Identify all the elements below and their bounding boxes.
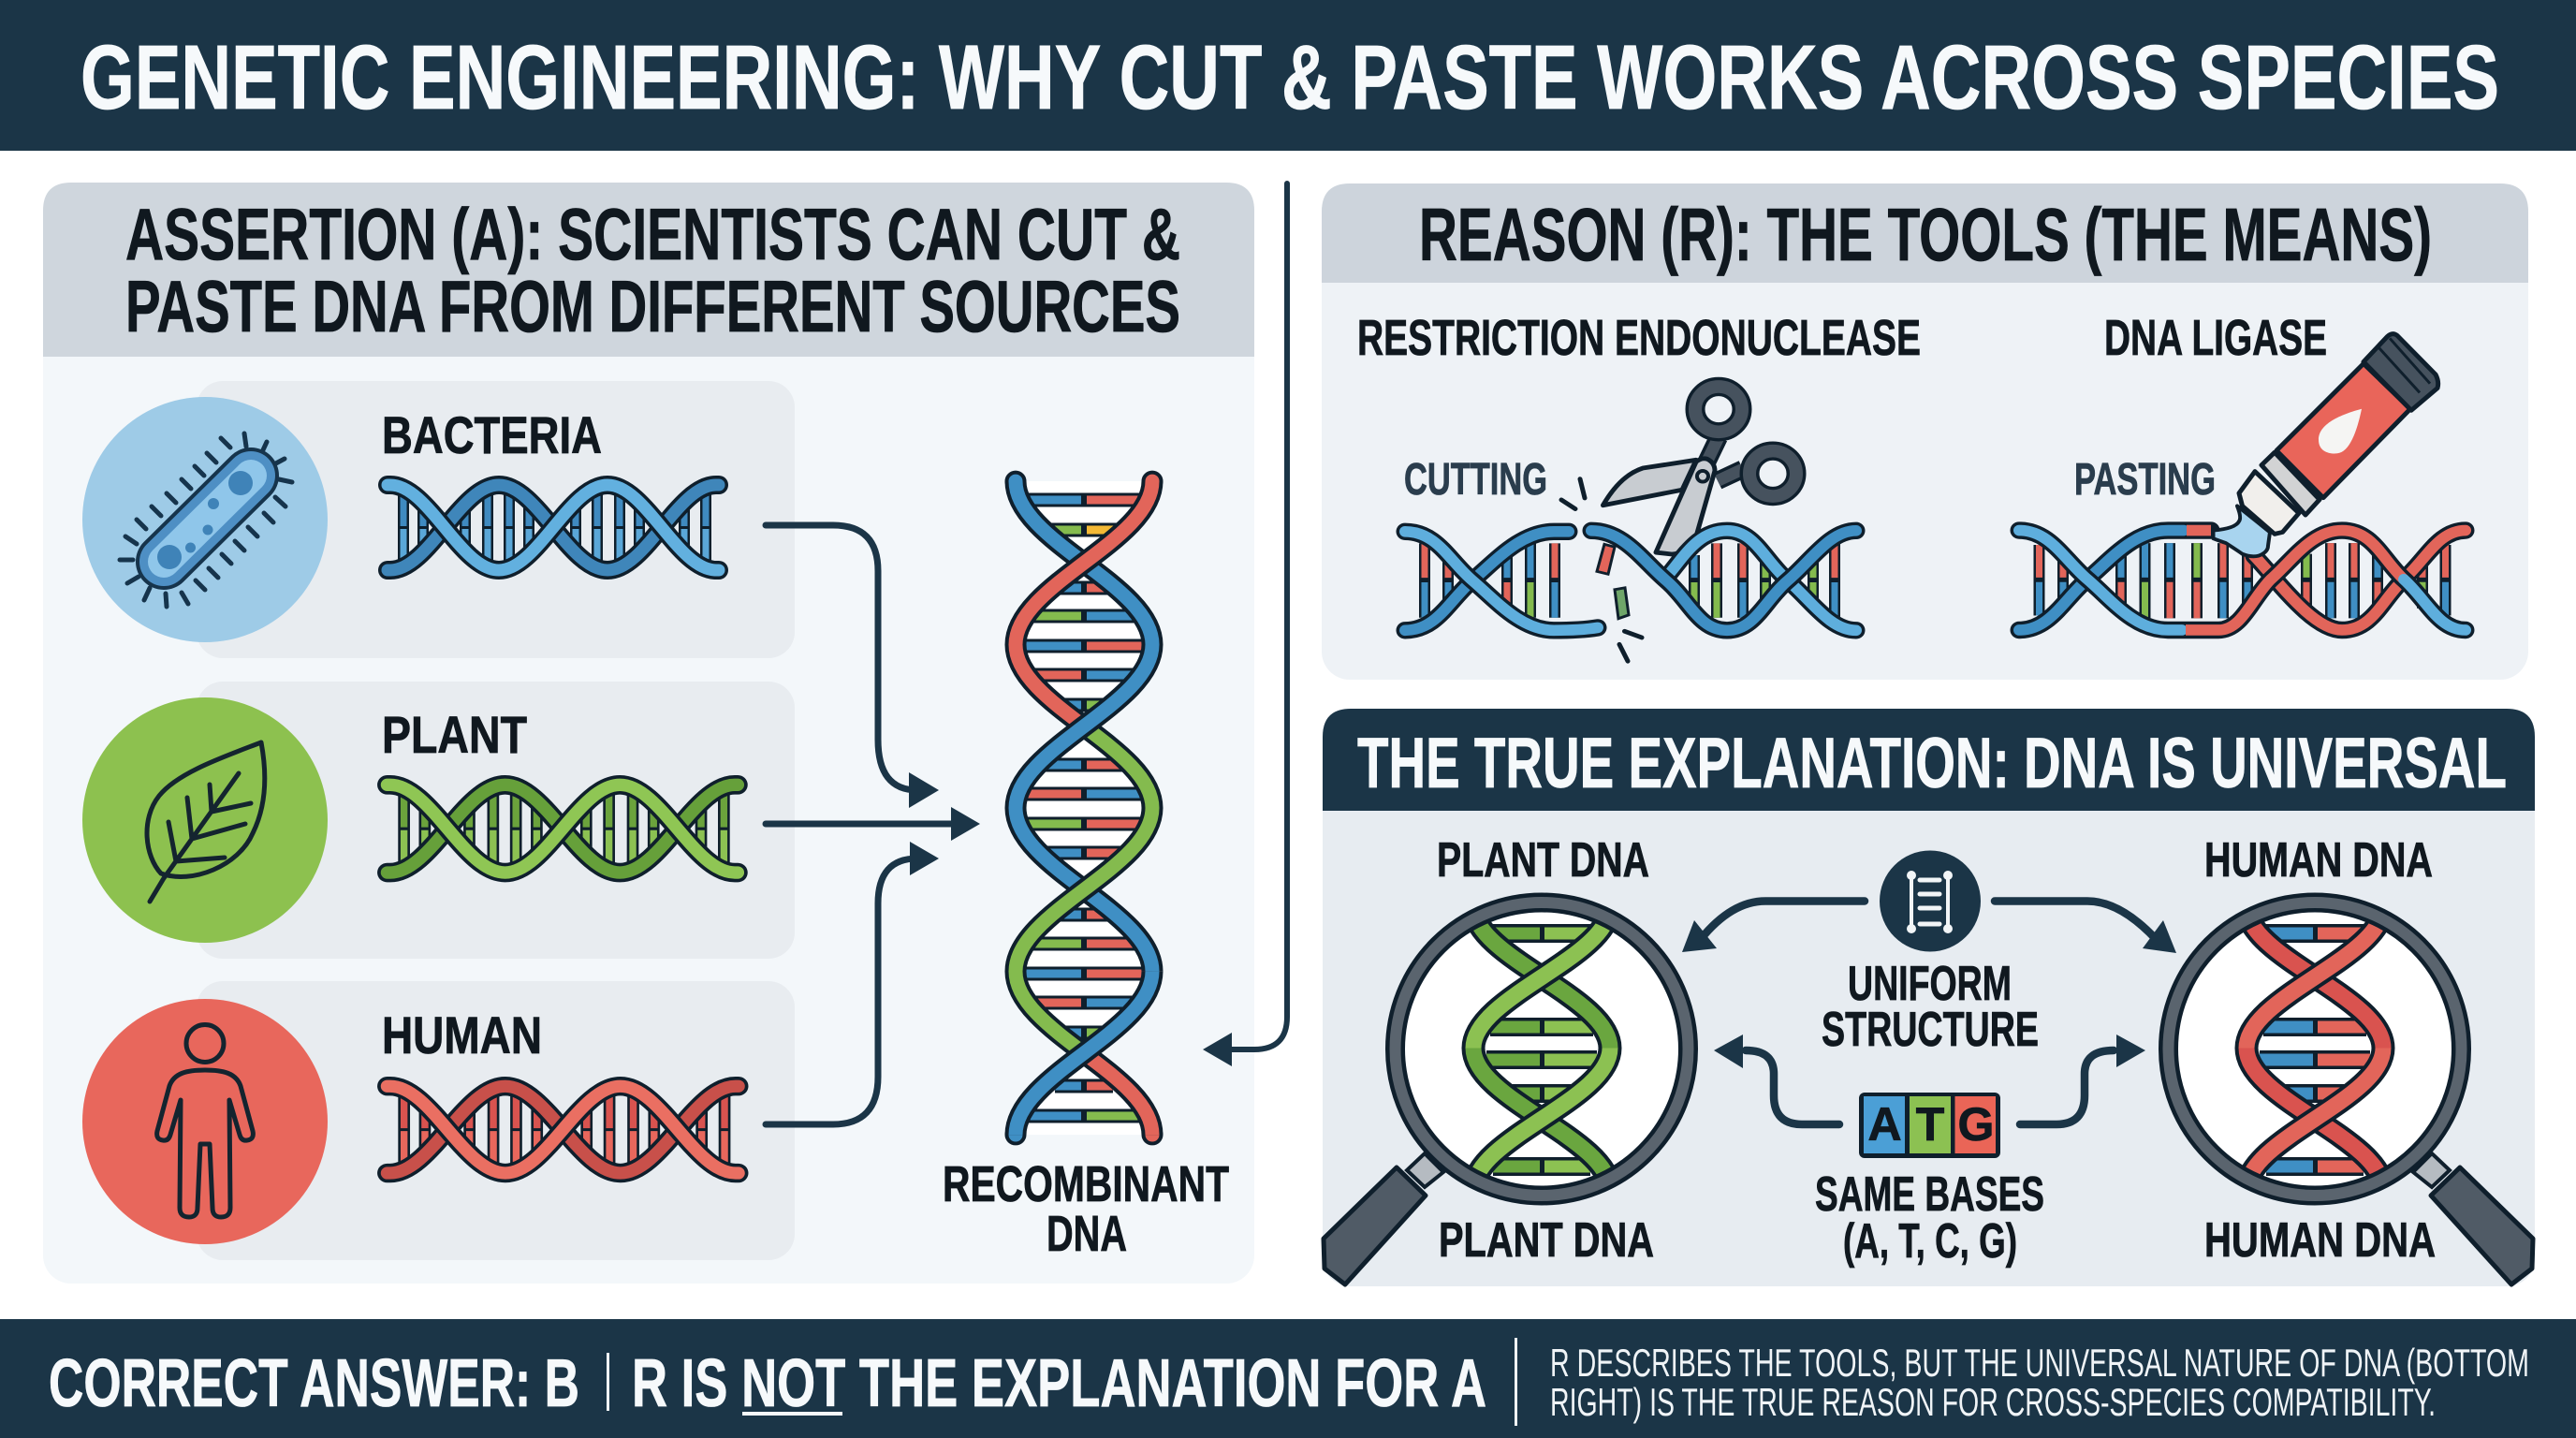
label: human DNA bottom: HUMAN DNA — [2204, 1213, 2436, 1268]
plant DNA helix — [388, 785, 738, 873]
magnifier: human DNA — [2168, 902, 2533, 1284]
icon: uniform structure ladder — [1880, 850, 1981, 951]
label: recombinant DNA: RECOMBINANT — [943, 1156, 1229, 1212]
label: pasting: PASTING — [2074, 455, 2216, 505]
label: DNA ligase: DNA LIGASE — [2104, 310, 2327, 366]
label: recombinant DNA: DNA — [1046, 1206, 1127, 1262]
row: human — [82, 981, 795, 1260]
label: same bases — [1815, 1167, 2044, 1269]
arrow: bases to plant — [1714, 1034, 1839, 1124]
label: same bases: SAME BASES — [1815, 1167, 2044, 1222]
label: plant DNA bottom: PLANT DNA — [1439, 1213, 1654, 1268]
human DNA helix — [388, 1086, 739, 1173]
label: same bases: (A, T, C, G) — [1843, 1214, 2017, 1269]
icon: ATG bases: T — [1916, 1098, 1944, 1151]
bacteria DNA helix — [388, 485, 719, 570]
DNA being cut — [1405, 479, 1856, 661]
label: uniform structure — [1822, 957, 2039, 1057]
icon: scissors — [1603, 387, 1796, 554]
label: plant DNA top: PLANT DNA — [1437, 833, 1649, 888]
label: plant: PLANT — [382, 705, 527, 764]
answer note — [1550, 1341, 2529, 1424]
label: bacteria: BACTERIA — [382, 405, 602, 464]
arrow: bases to human — [2020, 1034, 2145, 1124]
answer reason: R IS NOT THE EXPLANATION FOR A — [632, 1346, 1486, 1421]
panel: assertion — [43, 183, 1254, 1284]
arrow: plant to recombinant — [766, 807, 980, 841]
icon: ATG bases — [1859, 1093, 2000, 1158]
row: plant — [82, 682, 795, 959]
arrow: bacteria to recombinant — [766, 525, 939, 808]
footer banner — [0, 1319, 2576, 1438]
label: recombinant DNA — [943, 1156, 1229, 1262]
panel: reason — [1322, 183, 2528, 680]
label: cutting: CUTTING — [1404, 455, 1547, 505]
recombinant DNA helix — [1005, 471, 1163, 1145]
label: uniform structure: STRUCTURE — [1822, 1003, 2039, 1057]
label: restriction endonuclease: RESTRICTION ENDONUCLEASE — [1357, 310, 1921, 366]
magnifier: plant DNA — [1324, 902, 1689, 1284]
DNA being pasted — [2019, 531, 2466, 630]
arrow: structure to human — [1995, 901, 2176, 953]
arrow: human to recombinant — [766, 842, 939, 1124]
icon: person — [82, 999, 328, 1244]
title banner — [0, 0, 2576, 151]
icon: leaf — [82, 697, 328, 943]
arrow: structure to plant — [1682, 901, 1865, 952]
assertion heading: ASSERTION (A): SCIENTISTS CAN CUT & — [125, 193, 1180, 275]
label: uniform structure: UNIFORM — [1848, 957, 2012, 1011]
assertion heading: PASTE DNA FROM DIFFERENT SOURCES — [125, 265, 1180, 347]
label: human DNA top: HUMAN DNA — [2204, 833, 2433, 888]
arrow: tools feed into recombinant DNA — [1203, 183, 1287, 1066]
assertion heading — [125, 193, 1180, 347]
icon: glue tube — [2213, 334, 2438, 556]
icon: ATG bases: G — [1958, 1098, 1994, 1151]
label: human: HUMAN — [382, 1005, 542, 1064]
row: bacteria — [82, 381, 795, 658]
icon: ATG bases: A — [1867, 1098, 1902, 1151]
panel: true explanation — [1323, 709, 2535, 1286]
icon: bacteria — [82, 397, 328, 642]
correct answer: CORRECT ANSWER: B — [49, 1346, 579, 1421]
